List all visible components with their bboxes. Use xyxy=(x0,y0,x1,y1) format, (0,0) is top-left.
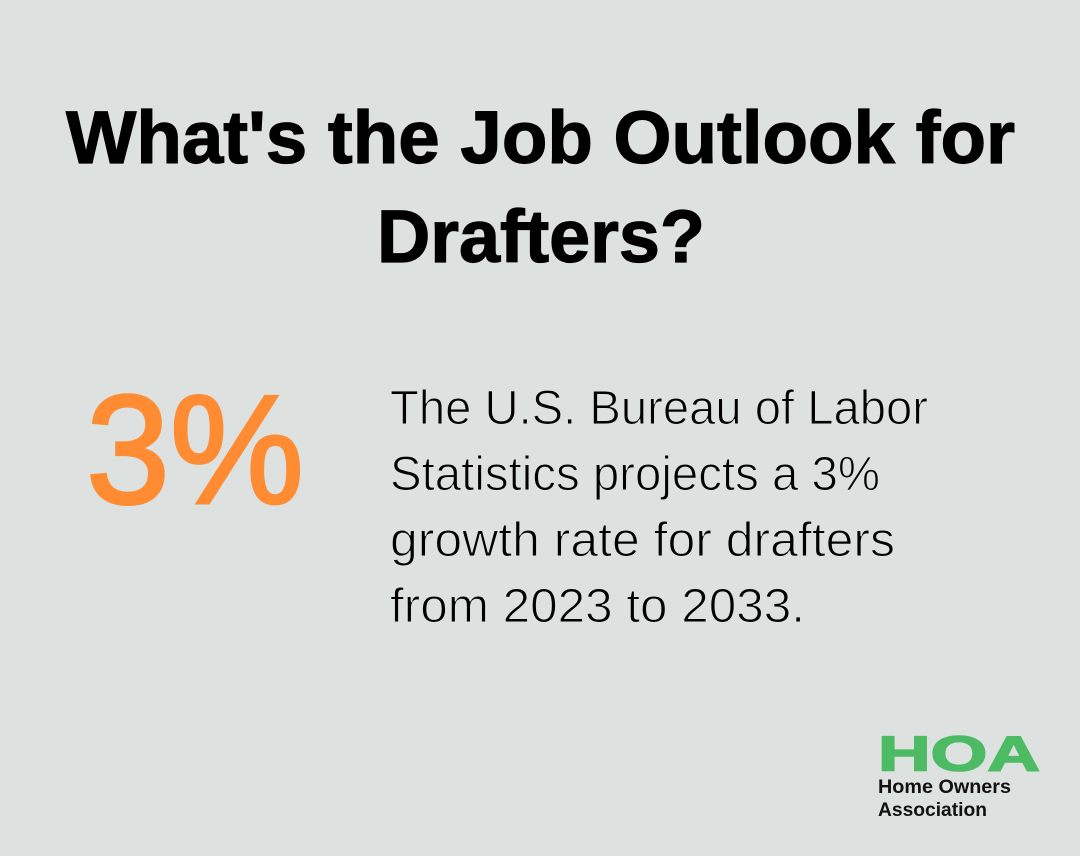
description text: Statistics projects a 3% xyxy=(390,448,880,501)
description text: growth rate for drafters xyxy=(390,514,895,567)
description text: from 2023 to 2033. xyxy=(390,580,805,633)
logo wordmark: HOA: HOA xyxy=(878,728,1040,782)
logo: Home Owners Association xyxy=(878,728,1040,821)
title xyxy=(66,96,1015,278)
logo tagline xyxy=(878,777,1011,821)
title: What's the Job Outlook for xyxy=(66,96,1015,179)
big statistic: 3%: 3% xyxy=(86,363,304,536)
title: Drafters? xyxy=(377,195,705,278)
description text xyxy=(390,382,928,633)
logo tagline: Association xyxy=(878,800,987,821)
description text: The U.S. Bureau of Labor xyxy=(390,382,928,435)
logo tagline: Home Owners xyxy=(878,777,1011,798)
